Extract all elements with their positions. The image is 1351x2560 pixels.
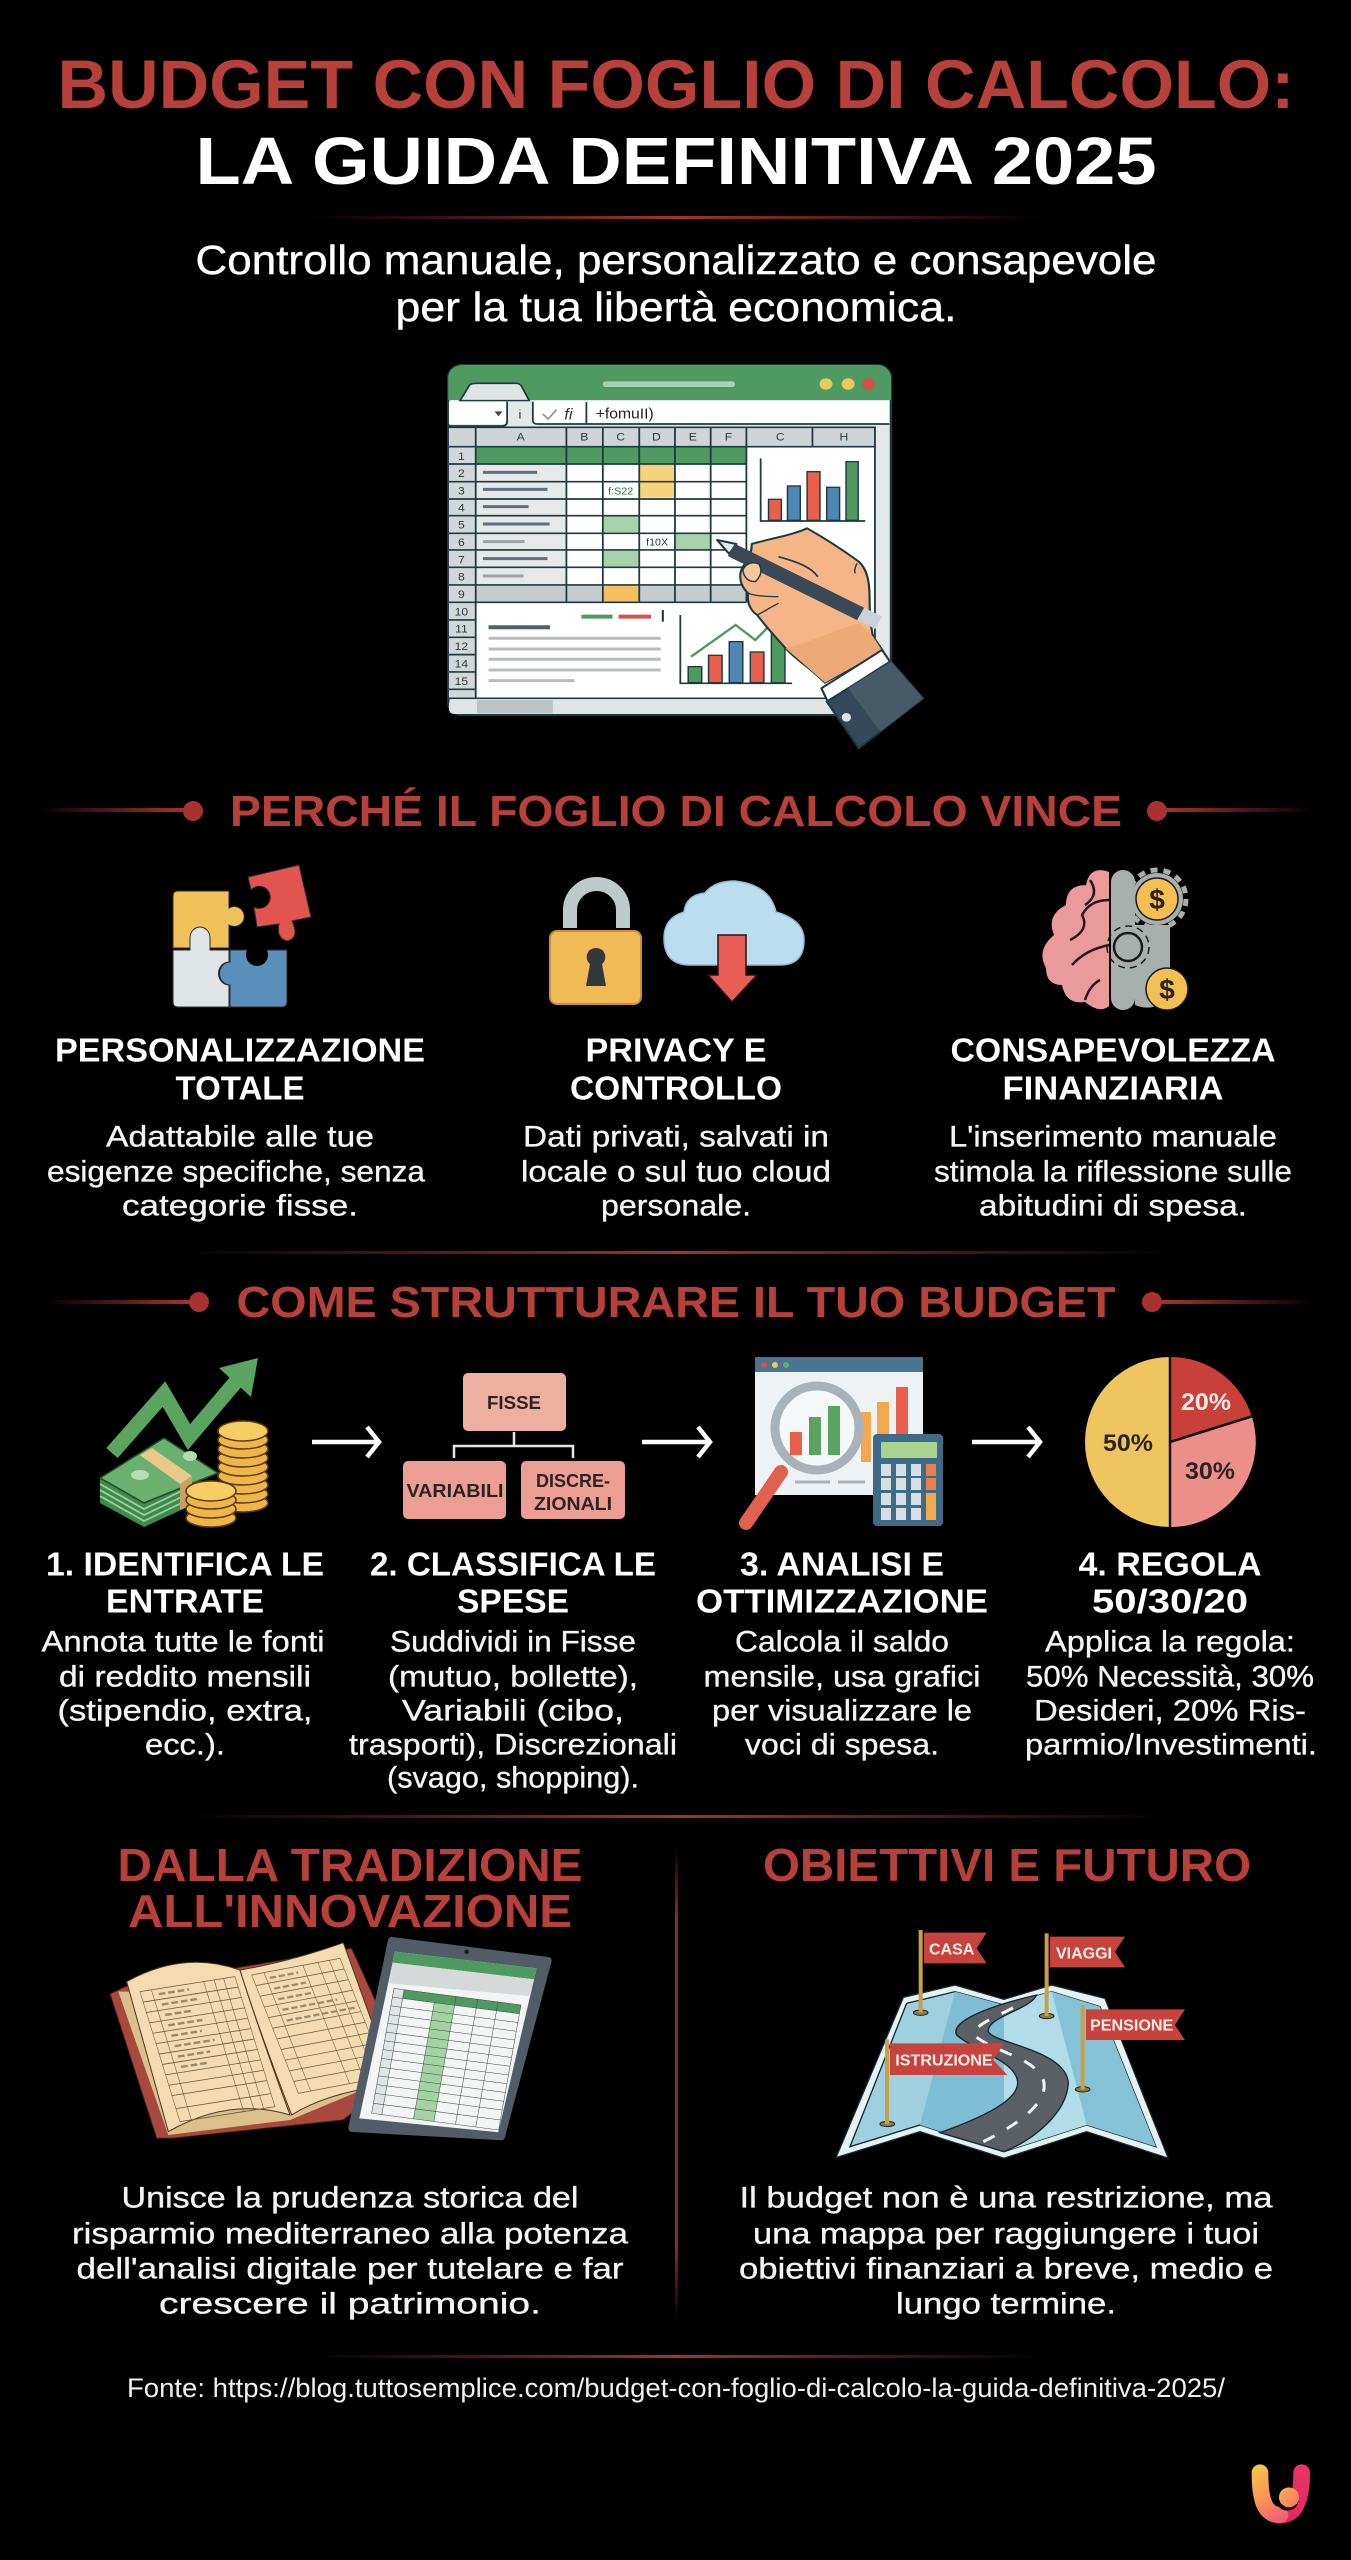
subtitle: Controllo manuale, personalizzato e consapevole xyxy=(196,237,1156,283)
icon: money, coins and rising arrow xyxy=(100,1358,268,1527)
text: Unisce la prudenza storica del xyxy=(122,2182,578,2214)
text: Annota tutte le fonti xyxy=(42,1626,324,1658)
illustration: road map with flags xyxy=(836,1930,1185,2158)
icon: brain and gears xyxy=(1042,870,1188,1010)
text: L'inserimento manuale xyxy=(949,1120,1277,1154)
column and row labels: C xyxy=(776,431,785,444)
text: crescere il patrimonio. xyxy=(159,2288,541,2320)
panel: step 2 classifica le spese xyxy=(349,1373,677,1794)
arrow xyxy=(312,1427,379,1457)
icon: chart, magnifier and calculator xyxy=(746,1357,943,1526)
column and row labels: E xyxy=(689,431,697,444)
icon: expense hierarchy xyxy=(403,1373,625,1519)
column and row labels: F xyxy=(725,431,732,444)
text xyxy=(1025,1626,1317,1762)
heading xyxy=(570,1032,782,1106)
subtitle: per la tua libertà economica. xyxy=(396,284,956,330)
heading: FINANZIARIA xyxy=(1002,1070,1224,1106)
arrow xyxy=(972,1427,1040,1457)
column and row labels: 9 xyxy=(458,588,465,601)
text xyxy=(47,1120,425,1222)
column and row labels: H xyxy=(839,431,848,444)
column and row labels: C xyxy=(616,431,626,444)
illustration: ledger book and tablet xyxy=(110,1941,548,2138)
subtitle xyxy=(196,237,1156,330)
column and row labels: 2 xyxy=(458,467,465,480)
heading: ALL'INNOVAZIONE xyxy=(128,1885,572,1937)
heading xyxy=(370,1546,656,1620)
heading xyxy=(55,1032,425,1106)
text xyxy=(521,1120,831,1222)
flag: pensione: PENSIONE xyxy=(1090,2018,1174,2035)
text xyxy=(704,1626,980,1762)
text: abitudini di spesa. xyxy=(979,1190,1247,1222)
panel: privacy e controllo xyxy=(521,881,831,1222)
section heading: perché il foglio di calcolo vince: PERCHÉ IL FOGLIO DI CALCOLO VINCE xyxy=(230,786,1122,836)
section heading: come strutturare il tuo budget: COME STRUTTURARE IL TUO BUDGET xyxy=(236,1278,1116,1327)
text xyxy=(349,1626,677,1794)
text: parmio/Investimenti. xyxy=(1025,1728,1317,1762)
heading: SPESE xyxy=(457,1582,569,1620)
icon: expense hierarchy: VARIABILI xyxy=(406,1481,504,1501)
icon: logo xyxy=(1260,2473,1302,2515)
text: Applica la regola: xyxy=(1045,1626,1295,1658)
icon: puzzle xyxy=(173,865,311,1007)
heading: TOTALE xyxy=(176,1070,304,1106)
text: (svago, shopping). xyxy=(387,1762,639,1794)
icon: brain and gears: $ xyxy=(1149,884,1165,915)
heading xyxy=(696,1546,988,1620)
text xyxy=(72,2182,628,2320)
icon: padlock xyxy=(550,884,641,1004)
heading: DALLA TRADIZIONE xyxy=(118,1839,582,1891)
text: mensile, usa grafici xyxy=(704,1660,980,1694)
column and row labels: 14 xyxy=(455,658,469,670)
flag: casa xyxy=(913,1930,987,2015)
heading xyxy=(950,1032,1276,1106)
text: dell'analisi digitale per tutelare e far xyxy=(76,2252,624,2286)
text: di reddito mensili xyxy=(59,1660,311,1694)
column and row labels: 3 xyxy=(458,485,465,497)
flag: istruzione xyxy=(880,2039,1007,2127)
column and row labels: 12 xyxy=(455,640,468,653)
heading: 50/30/20 xyxy=(1092,1582,1248,1620)
illustration: spreadsheet with hand: fi xyxy=(564,407,573,423)
column and row labels: f10X xyxy=(646,538,668,548)
column and row labels: 5 xyxy=(458,519,465,532)
panel: personalizzazione totale xyxy=(47,865,425,1222)
icon: expense hierarchy: ZIONALI xyxy=(534,1494,612,1514)
text: per visualizzare le xyxy=(712,1694,972,1728)
heading xyxy=(1078,1546,1262,1620)
column and row labels: 1 xyxy=(458,450,465,463)
text: 50% Necessità, 30% xyxy=(1026,1660,1314,1694)
chart: pie 50/30/20: 50% xyxy=(1103,1430,1153,1457)
text: obiettivi finanziari a breve, medio e xyxy=(739,2252,1273,2286)
text: Adattabile alle tue xyxy=(106,1120,374,1154)
section heading: come strutturare il tuo budget xyxy=(44,1278,1316,1327)
column and row labels: A xyxy=(517,431,525,444)
column and row labels xyxy=(455,431,848,688)
column and row labels: 4 xyxy=(458,502,465,514)
icon: expense hierarchy: FISSE xyxy=(487,1393,541,1413)
column and row labels: 15 xyxy=(455,675,469,688)
illustration: spreadsheet with hand: i xyxy=(519,408,521,422)
icon: cloud with arrow xyxy=(664,881,804,1002)
bar chart top xyxy=(761,458,865,521)
text xyxy=(42,1626,324,1762)
text: voci di spesa. xyxy=(745,1728,939,1762)
column and row labels: 7 xyxy=(458,554,465,566)
panel: step 4 regola 50/30/20 xyxy=(1025,1357,1317,1762)
heading: 1. IDENTIFICA LE xyxy=(46,1546,324,1582)
flag: casa: CASA xyxy=(929,1942,975,1959)
column and row labels: 11 xyxy=(455,623,468,636)
title: LA GUIDA DEFINITIVA 2025 xyxy=(196,124,1156,199)
text: Desideri, 20% Ris- xyxy=(1034,1694,1306,1728)
bar chart bottom xyxy=(680,615,792,683)
text: Il budget non è una restrizione, ma xyxy=(740,2182,1273,2214)
text xyxy=(739,2182,1273,2320)
text: (mutuo, bollette), xyxy=(388,1660,638,1694)
title xyxy=(58,46,1294,199)
chart: pie 50/30/20 xyxy=(1085,1357,1256,1527)
illustration: spreadsheet with hand: +fomuII) xyxy=(596,406,654,423)
text: personale. xyxy=(601,1190,751,1222)
text: Dati privati, salvati in xyxy=(523,1120,829,1154)
heading: 4. REGOLA xyxy=(1078,1546,1262,1582)
title: BUDGET CON FOGLIO DI CALCOLO: xyxy=(58,46,1294,123)
text: Variabili (cibo, xyxy=(402,1694,624,1728)
column and row labels: f:S22 xyxy=(608,487,633,497)
panel: dalla tradizione all'innovazione xyxy=(72,1839,628,2320)
heading: OTTIMIZZAZIONE xyxy=(696,1582,988,1620)
icon: brain and gears: $ xyxy=(1159,974,1175,1005)
text: risparmio mediterraneo alla potenza xyxy=(72,2218,628,2250)
arrow xyxy=(642,1427,710,1457)
icon: expense hierarchy: DISCRE- xyxy=(536,1471,610,1491)
heading: PRIVACY E xyxy=(586,1032,766,1068)
text: (stipendio, extra, xyxy=(58,1694,312,1728)
text: stimola la riflessione sulle xyxy=(934,1156,1292,1188)
flag: viaggi xyxy=(1039,1933,1125,2019)
panel: obiettivi e futuro xyxy=(739,1839,1273,2320)
text: trasporti), Discrezionali xyxy=(349,1728,677,1762)
heading: CONTROLLO xyxy=(570,1070,782,1106)
text: locale o sul tuo cloud xyxy=(521,1156,831,1188)
flag: istruzione: ISTRUZIONE xyxy=(895,2053,993,2070)
column and row labels: 6 xyxy=(458,536,465,549)
text: una mappa per raggiungere i tuoi xyxy=(753,2218,1259,2250)
column and row labels: B xyxy=(580,431,588,444)
chart: pie 50/30/20: 30% xyxy=(1185,1458,1235,1485)
text: ecc.). xyxy=(145,1728,225,1762)
coins xyxy=(186,1421,268,1527)
tablet xyxy=(352,1941,548,2137)
column and row labels: 8 xyxy=(458,571,465,584)
text: lungo termine. xyxy=(896,2288,1116,2320)
heading xyxy=(46,1546,324,1620)
text: esigenze specifiche, senza xyxy=(47,1156,425,1188)
heading: ENTRATE xyxy=(106,1582,264,1620)
flag: pensione xyxy=(1075,2005,1185,2092)
flag: viaggi: VIAGGI xyxy=(1056,1945,1112,1962)
hand holding pen xyxy=(717,528,923,748)
heading xyxy=(118,1839,582,1937)
illustration: spreadsheet with hand xyxy=(448,365,923,748)
heading: OBIETTIVI E FUTURO xyxy=(763,1839,1251,1891)
panel: consapevolezza finanziaria xyxy=(934,870,1292,1222)
source line: Fonte: https://blog.tuttosemplice.com/budget-con-foglio-di-calcolo-la-guida-definitiva-2025/ xyxy=(127,2373,1226,2403)
panel: step 1 identifica le entrate xyxy=(42,1358,324,1762)
chart: pie 50/30/20: 20% xyxy=(1181,1389,1231,1416)
column and row labels: D xyxy=(652,431,661,444)
heading: CONSAPEVOLEZZA xyxy=(950,1032,1276,1068)
text: categorie fisse. xyxy=(122,1190,358,1222)
heading: 3. ANALISI E xyxy=(740,1546,944,1582)
text: Suddividi in Fisse xyxy=(390,1626,636,1658)
text: Calcola il saldo xyxy=(735,1626,949,1658)
heading: PERSONALIZZAZIONE xyxy=(55,1032,425,1068)
column and row labels: 10 xyxy=(455,606,469,618)
panel: step 3 analisi e ottimizzazione xyxy=(696,1357,988,1762)
heading: 2. CLASSIFICA LE xyxy=(370,1546,656,1582)
section heading: perché il foglio di calcolo vince xyxy=(36,786,1315,836)
text xyxy=(934,1120,1292,1222)
